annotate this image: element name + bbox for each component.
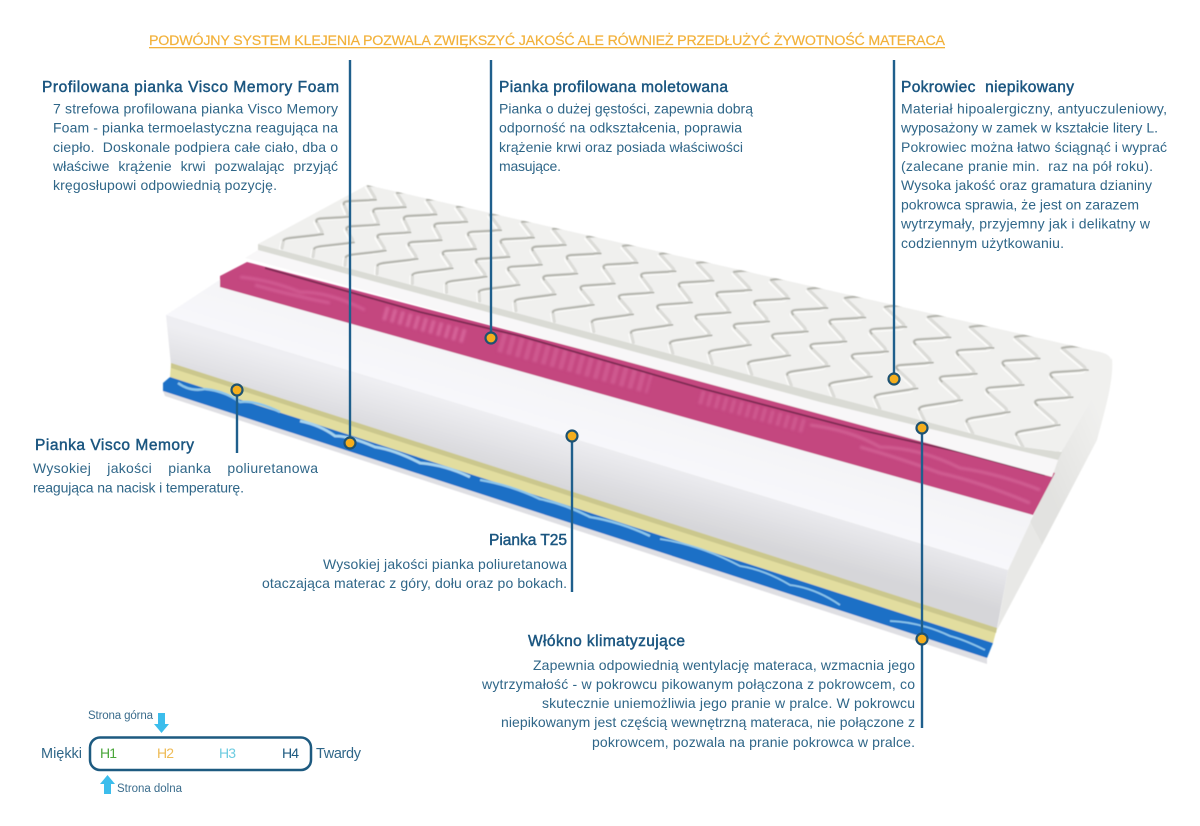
pointer: moletowana xyxy=(486,60,496,344)
callout: Pianka T25 xyxy=(262,532,567,591)
callout: Pokrowiec niepikowany: wytrzymały, przyjemny jak i delikatny w xyxy=(900,216,1151,232)
callout: Pokrowiec niepikowany xyxy=(900,79,1167,251)
callout: Profilowana pianka Visco Memory Foam: ciepło. Doskonale podpiera całe ciało, dba o xyxy=(53,139,338,155)
callout: Włókno klimatyzujące xyxy=(481,633,915,750)
callout: Pianka profilowana moletowana: Pianka o dużej gęstości, zapewnia dobrą xyxy=(499,100,753,116)
callout: Profilowana pianka Visco Memory Foam: 7 strefowa profilowana pianka Visco Memory xyxy=(53,100,338,116)
label: soft: Miękki xyxy=(41,746,82,762)
pointer: Visco Memory Foam xyxy=(344,60,356,448)
callout: Włókno klimatyzujące: wytrzymałość - w pokrowcu pikowanym połączona z pokrowcem, co xyxy=(481,676,915,692)
blue climate fibre layer xyxy=(163,377,993,658)
callout: Pianka profilowana moletowana: odporność na odkształcenia, poprawia xyxy=(499,120,742,136)
callout: Pianka Visco Memory: reagująca na nacisk i temperaturę. xyxy=(33,480,244,496)
callout: Włókno klimatyzujące: Włókno klimatyzujące xyxy=(528,633,685,650)
mattress illustration xyxy=(163,181,1112,664)
title: PODWÓJNY SYSTEM KLEJENIA POZWALA ZWIĘKSZYĆ JAKOŚĆ ALE RÓWNIEŻ PRZEDŁUŻYĆ ŻYWOTNOŚĆ MATERACA xyxy=(149,31,946,49)
arrow: top side xyxy=(154,713,169,733)
callout: Pokrowiec niepikowany: Pokrowiec można łatwo ściągnąć i wyprać xyxy=(901,139,1167,155)
bottom white layer xyxy=(163,391,987,664)
pointer: włókno klimatyzujące xyxy=(916,422,928,728)
label: bottom side: Strona dolna xyxy=(117,783,183,795)
pink profiled foam layer xyxy=(220,262,1055,515)
block top surface xyxy=(166,262,1042,570)
label: top side: Strona górna xyxy=(88,710,154,722)
callout: Pokrowiec niepikowany: wyposażony w zamek w kształcie litery L. xyxy=(900,120,1158,136)
callout: Pianka profilowana moletowana xyxy=(499,79,753,174)
callout: Pianka T25: Pianka T25 xyxy=(489,532,567,549)
callout: Pokrowiec niepikowany: pokrowca sprawia, że jest on zarazem xyxy=(901,196,1139,212)
callout: Pianka profilowana moletowana: masujące. xyxy=(499,158,561,174)
firmness scale legend xyxy=(41,710,362,795)
callout: Profilowana pianka Visco Memory Foam: Foam - pianka termoelastyczna reagująca na xyxy=(53,120,338,136)
callout: Pianka Visco Memory: Wysokiej jakości pianka poliuretanowa xyxy=(33,460,318,476)
callout: Pianka Visco Memory: Pianka Visco Memory xyxy=(35,437,194,454)
white sheet under the quilted cover xyxy=(245,250,1058,477)
firmness levels: H3 xyxy=(219,745,236,761)
scale frame xyxy=(90,738,311,770)
block front face xyxy=(166,315,1008,628)
callout: Pianka T25: otaczająca materac z góry, dołu oraz po bokach. xyxy=(262,575,567,591)
quilted zigzag pattern xyxy=(273,181,1096,457)
yellow visco layer xyxy=(170,363,997,643)
callout: Profilowana pianka Visco Memory Foam: właściwe krążenie krwi pozwalając przyjąć xyxy=(52,158,338,174)
callout: Pianka profilowana moletowana: krążenie krwi oraz posiada właściwości xyxy=(499,139,743,155)
callout: Pianka profilowana moletowana: Pianka profilowana moletowana xyxy=(499,79,728,96)
callout: Pokrowiec niepikowany: codziennym użytkowaniu. xyxy=(901,235,1064,251)
label: hard: Twardy xyxy=(316,746,362,762)
firmness levels xyxy=(100,745,299,761)
firmness levels: H2 xyxy=(157,745,174,761)
side face of mattress xyxy=(1030,358,1112,545)
quilted cover front edge xyxy=(258,244,1062,460)
arrow: bottom side xyxy=(100,775,115,794)
callout: Pokrowiec niepikowany: Wysoka jakość oraz gramatura dzianiny xyxy=(901,177,1152,193)
callout: Pianka T25: Wysokiej jakości pianka poliuretanowa xyxy=(323,556,567,572)
firmness levels: H4 xyxy=(282,745,299,761)
pointer: Visco Memory xyxy=(232,384,242,453)
firmness levels: H1 xyxy=(100,745,117,761)
quilted cover top surface xyxy=(258,185,1112,452)
callout: Profilowana pianka Visco Memory Foam: kręgosłupowi odpowiednią pozycję. xyxy=(53,177,277,193)
side face of foam block xyxy=(997,522,1042,630)
callout: Profilowana pianka Visco Memory Foam: Profilowana pianka Visco Memory Foam xyxy=(42,79,339,96)
callout: Włókno klimatyzujące: pokrowcem, pozwala na pranie pokrowca w pralce. xyxy=(592,734,915,750)
callout: Włókno klimatyzujące: skutecznie uniemożliwia jego pranie w pralce. W pokrowcu xyxy=(542,695,915,711)
callout: Pokrowiec niepikowany: Materiał hipoalergiczny, antyuczuleniowy, xyxy=(901,100,1167,116)
callout: Pianka Visco Memory xyxy=(33,437,318,496)
callout: Włókno klimatyzujące: niepikowanym jest częścią wewnętrzną materaca, nie połączone z xyxy=(501,714,915,730)
callout: Włókno klimatyzujące: Zapewnia odpowiednią wentylację materaca, wzmacnia jego xyxy=(533,657,915,673)
pointer: T25 xyxy=(566,430,578,592)
callout: Pokrowiec niepikowany: Pokrowiec niepikowany xyxy=(901,79,1074,96)
pointer: pokrowiec xyxy=(888,60,900,384)
callout: Profilowana pianka Visco Memory Foam xyxy=(42,79,339,193)
callout: Pokrowiec niepikowany: (zalecane pranie min. raz na pół roku). xyxy=(901,158,1153,174)
